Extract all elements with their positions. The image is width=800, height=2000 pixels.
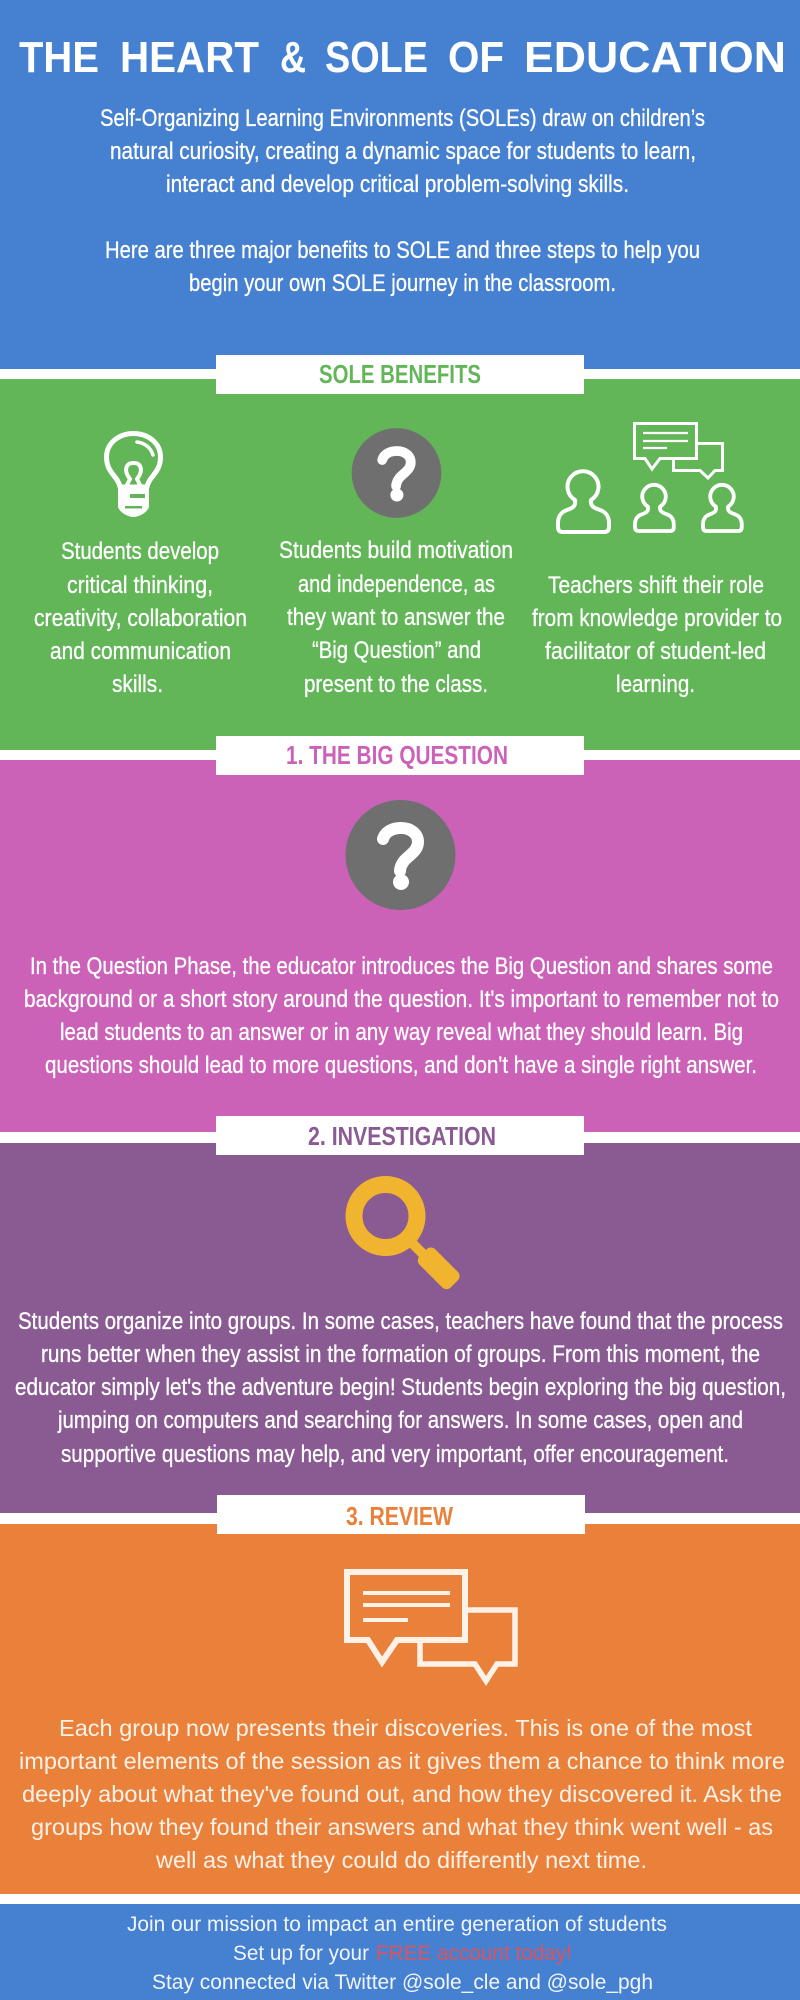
- title: THE: [19, 34, 99, 82]
- heading: review: 3. REVIEW: [346, 1501, 453, 1531]
- text: benefit two: [279, 537, 513, 698]
- text: footer call to action: Set up for your: [233, 1942, 369, 1965]
- heading: the big question: [216, 736, 584, 775]
- heading: investigation: [216, 1116, 584, 1155]
- title: &: [280, 34, 306, 82]
- icon: teacher and students: [558, 424, 742, 532]
- icon: question mark: [346, 800, 456, 910]
- heading: review: [217, 1495, 585, 1534]
- text: benefit one: skills.: [112, 671, 163, 698]
- panel: intro: [0, 0, 800, 369]
- text: benefit two: present to the class.: [304, 671, 488, 698]
- heading: SOLE benefits: [216, 355, 584, 394]
- icon: speech bubbles small: [634, 424, 722, 478]
- text: review: deeply about what they've found out, and how they discovered it. Ask the: [22, 1781, 782, 1807]
- panel: SOLE benefits: [0, 355, 800, 750]
- icon: person small: [703, 485, 742, 531]
- text: benefit one: critical thinking,: [67, 572, 213, 599]
- text: benefit three: learning.: [616, 671, 695, 698]
- title: HEART: [120, 34, 259, 82]
- text: benefit two: Students build motivation: [279, 537, 513, 564]
- intro text: natural curiosity, creating a dynamic space for students to learn,: [110, 138, 696, 165]
- text: benefit three: facilitator of student-led: [545, 638, 766, 665]
- text: footer call to action: [127, 1913, 667, 1994]
- icon: person large: [558, 471, 609, 532]
- heading: SOLE benefits: SOLE BENEFITS: [319, 359, 481, 389]
- icon: question mark: [352, 428, 441, 518]
- intro text: begin your own SOLE journey in the classroom.: [189, 270, 616, 297]
- text: benefit two: “Big Question” and: [312, 637, 481, 664]
- text: benefit one: and communication: [50, 638, 231, 665]
- intro text: [100, 105, 705, 297]
- intro text: Here are three major benefits to SOLE and three steps to help you: [105, 237, 700, 264]
- icon: speech bubbles: [347, 1572, 515, 1681]
- text: benefit one: creativity, collaboration: [34, 605, 247, 632]
- text: investigation: [15, 1308, 786, 1468]
- icon: magnifying glass: [354, 1184, 462, 1292]
- intro text: Self-Organizing Learning Environments (SOLEs) draw on children’s: [100, 105, 705, 132]
- panel: review: [0, 1495, 800, 1894]
- text: benefit two: and independence, as: [298, 571, 495, 598]
- text: question phase: [24, 953, 779, 1079]
- heading: the big question: 1. THE BIG QUESTION: [286, 740, 508, 770]
- title: OF: [448, 34, 504, 82]
- text: review: Each group now presents their discoveries. This is one of the most: [59, 1715, 752, 1741]
- text: benefit two: they want to answer the: [287, 604, 505, 631]
- text: review: groups how they found their answers and what they think went well - as: [31, 1814, 773, 1840]
- text: footer call to action: FREE account today!: [376, 1942, 572, 1965]
- icon: person small: [635, 485, 674, 531]
- icon: light bulb: [106, 434, 160, 517]
- panel: the big question: [0, 736, 800, 1132]
- heading: investigation: 2. INVESTIGATION: [308, 1121, 496, 1151]
- text: footer call to action: Stay connected via Twitter @sole_cle and @sole_pgh: [152, 1971, 653, 1994]
- text: benefit three: [532, 572, 782, 698]
- text: benefit one: Students develop: [61, 538, 219, 565]
- title: EDUCATION: [524, 34, 786, 82]
- intro text: interact and develop critical problem-solving skills.: [166, 171, 629, 198]
- panel: investigation: [0, 1116, 800, 1513]
- text: review: important elements of the session as it gives them a chance to think more: [19, 1748, 785, 1774]
- text: footer call to action: Join our mission to impact an entire generation of students: [127, 1913, 667, 1936]
- text: review: [19, 1715, 785, 1873]
- text: benefit one: [34, 538, 247, 698]
- panel: footer: [0, 1904, 800, 2000]
- text: review: well as what they could do differently next time.: [155, 1847, 647, 1873]
- title: [19, 34, 786, 82]
- text: benefit three: Teachers shift their role: [548, 572, 764, 599]
- title: SOLE: [325, 34, 428, 82]
